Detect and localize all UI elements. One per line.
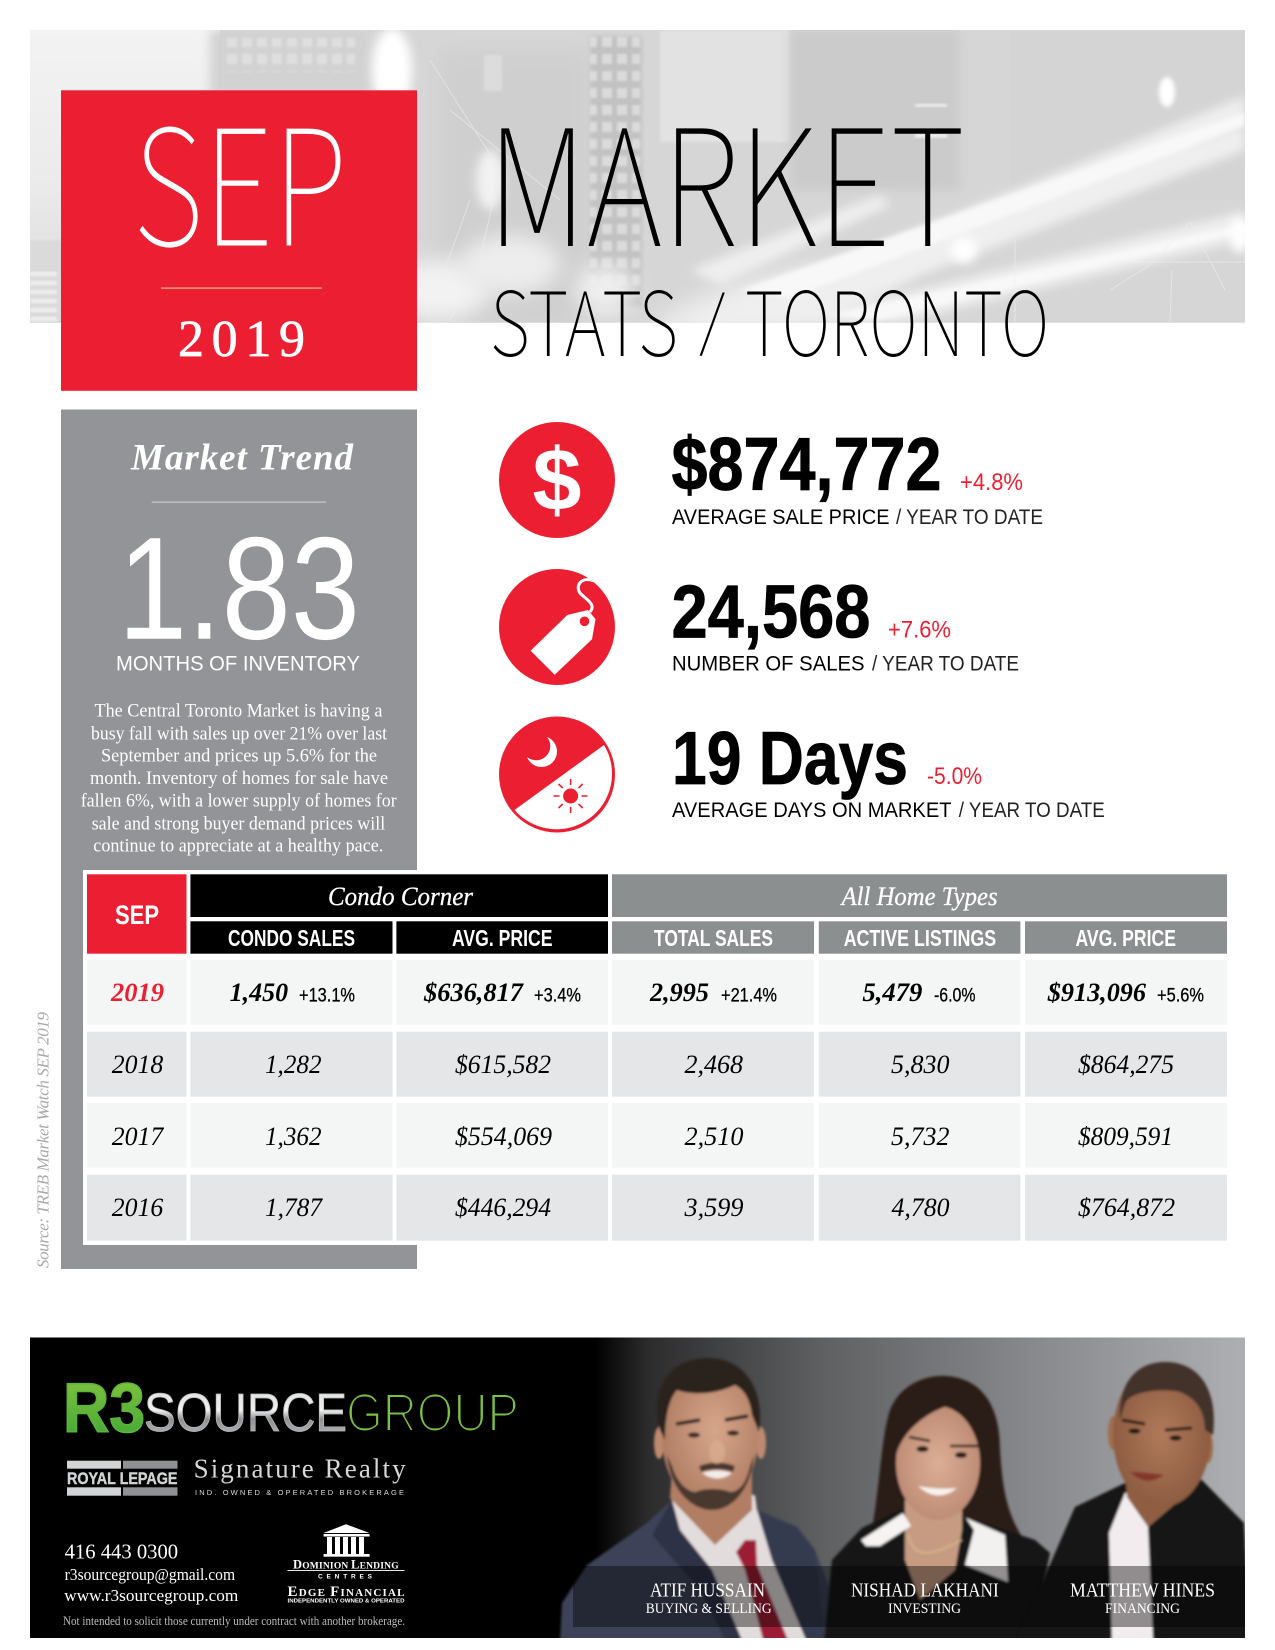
stat: number of sales: 24,568 (672, 569, 870, 653)
table row: 2016: 4,780 (892, 1193, 950, 1222)
table header: All Home Types: All Home Types (840, 882, 998, 911)
table row: 2017 (87, 1103, 1227, 1168)
big number 1.83: 1.83 (118, 507, 360, 670)
title: MARKET: MARKET (487, 58, 965, 293)
table row: 2017: 2017 (112, 1122, 164, 1151)
table row: 2017: 1,362 (265, 1122, 322, 1151)
table row: 2019 (87, 960, 1227, 1025)
contact details: 416 443 0300 (65, 1539, 178, 1563)
panel: red date block (61, 60, 417, 391)
caption: Nishad Lakhani: INVESTING (888, 1601, 961, 1617)
stat: average sale price: $874,772 (672, 422, 942, 506)
logo: Royal LePage (67, 1461, 178, 1496)
logo: Dominion Lending Centres: INDEPENDENTLY OWNED & OPERATED (288, 1599, 405, 1605)
caption: Matthew Hines: MATTHEW HINES (1070, 1580, 1215, 1602)
stat: days on market: / YEAR TO DATE (959, 799, 1105, 822)
subtitle: STATS / TORONTO: / (699, 268, 725, 364)
table row: 2016: 2016 (112, 1193, 163, 1222)
banner photo: city at night (30, 30, 1245, 323)
table row: 2019: +21.4% (721, 984, 777, 1006)
table header: active listings (819, 921, 1020, 954)
table header: All Home Types (612, 874, 1227, 917)
table: market statistics (83, 870, 1227, 1245)
table row: 2018: $615,582 (455, 1050, 551, 1079)
stat: average sale price: / YEAR TO DATE (896, 506, 1043, 529)
photo: Nishad Lakhani (824, 1376, 1050, 1640)
market trend paragraph: month. Inventory of homes for sale have (90, 768, 388, 789)
table row: 2019: +13.1% (299, 984, 355, 1006)
stat: average sale price (672, 422, 1043, 529)
table row: 2018: 5,830 (891, 1050, 950, 1079)
photo: Atif Hussain (560, 1358, 829, 1640)
table header: all avg price (1025, 921, 1227, 954)
stat: number of sales (672, 569, 1019, 676)
icon: day and night (499, 716, 615, 832)
market trend paragraph: The Central Toronto Market is having a (94, 701, 383, 722)
contact details (63, 1539, 405, 1628)
logo: Dominion Lending Centres: CENTRES (318, 1574, 373, 1581)
stat: days on market (672, 716, 1105, 822)
table header: total sales (612, 921, 814, 954)
table row: 2019: $636,817 (423, 978, 524, 1007)
caption band (573, 1566, 1245, 1627)
table row: 2018: 2,468 (684, 1050, 743, 1079)
table header: SEP (87, 874, 186, 954)
table row: 2019: -6.0% (934, 984, 976, 1006)
icon: dollar: $ (533, 430, 581, 529)
table header: condo sales (190, 921, 392, 954)
source note: Source: TREB Market Watch SEP 2019 (34, 1012, 52, 1268)
table row: 2019: $913,096 (1047, 978, 1146, 1007)
logo: Royal LePage: ROYAL LEPAGE (67, 1470, 178, 1488)
table row: 2017: 5,732 (891, 1122, 950, 1151)
table row: 2017: 2,510 (684, 1122, 744, 1151)
logo: Dominion Lending Centres (288, 1524, 405, 1605)
table row: 2017: $809,591 (1078, 1122, 1173, 1151)
table header: SEP: SEP (115, 900, 159, 930)
table row: 2016 (87, 1175, 1227, 1241)
contact details: www.r3sourcegroup.com (64, 1586, 238, 1605)
table row: 2019: +5.6% (1157, 984, 1204, 1006)
market trend paragraph: continue to appreciate at a healthy pace. (93, 836, 383, 857)
logo: R3 Source Group: SOURCE (144, 1383, 347, 1443)
caption: Nishad Lakhani: NISHAD LAKHANI (851, 1580, 999, 1602)
label: months of inventory: MONTHS OF INVENTORY (116, 652, 360, 676)
caption: Atif Hussain: BUYING & SELLING (646, 1601, 772, 1617)
market trend paragraph: sale and strong buyer demand prices will (92, 813, 385, 834)
table header: all avg price: AVG. PRICE (1076, 925, 1176, 951)
contact details: Not intended to solicit those currently under contract with another brokerage. (63, 1614, 405, 1628)
subtitle: STATS / TORONTO: STATS (490, 253, 678, 382)
footer panel (30, 1338, 1250, 1640)
table row: 2018 (87, 1032, 1227, 1097)
table row: 2016: $764,872 (1078, 1193, 1175, 1222)
caption: Atif Hussain (646, 1580, 772, 1617)
logo: R3 Source Group: GROUP (346, 1383, 519, 1443)
table header: condo avg price (396, 921, 608, 954)
heading: Market Trend: Market Trend (130, 437, 354, 478)
contact details: r3sourcegroup@gmail.com (65, 1565, 235, 1584)
heading: SEP: SEP (133, 60, 347, 292)
logo: Dominion Lending Centres: DOMINION LENDING (293, 1557, 399, 1571)
table row: 2018: 1,282 (265, 1050, 322, 1079)
icon: price tag (499, 569, 615, 685)
table row: 2019: 1,450 (230, 978, 288, 1007)
brokerage: Signature Realty: Signature Realty (194, 1453, 406, 1483)
stat: days on market: AVERAGE DAYS ON MARKET (672, 799, 952, 822)
brokerage: Signature Realty (194, 1453, 406, 1497)
logo: R3 Source Group (63, 1369, 519, 1447)
caption: Matthew Hines: FINANCING (1105, 1601, 1180, 1617)
subtitle: STATS / TORONTO (490, 253, 1049, 382)
table header: condo avg price: AVG. PRICE (452, 925, 552, 951)
table row: 2019: 5,479 (862, 978, 922, 1007)
table row: 2019: +3.4% (534, 984, 581, 1006)
panel: market trend (61, 410, 417, 1269)
stat: number of sales: NUMBER OF SALES (672, 653, 864, 676)
caption: Atif Hussain: ATIF HUSSAIN (650, 1580, 765, 1602)
table row: 2016: $446,294 (455, 1193, 551, 1222)
stat: average sale price: AVERAGE SALE PRICE (672, 506, 890, 529)
table row: 2018: $864,275 (1078, 1050, 1174, 1079)
stat: average sale price: +4.8% (960, 469, 1023, 496)
table header: active listings: ACTIVE LISTINGS (844, 925, 996, 951)
brokerage: Signature Realty: IND. OWNED & OPERATED BROKERAGE (195, 1488, 404, 1497)
table header: Condo Corner (190, 874, 608, 917)
table header: condo sales: CONDO SALES (228, 925, 355, 951)
market trend paragraph (81, 701, 397, 857)
icon: dollar (499, 422, 615, 538)
table row: 2018: 2018 (112, 1050, 163, 1079)
caption: Nishad Lakhani (851, 1580, 999, 1617)
market trend paragraph: fallen 6%, with a lower supply of homes for (81, 791, 397, 812)
stat: days on market: 19 Days (672, 716, 908, 800)
logo: R3 Source Group: R3 (63, 1369, 145, 1447)
stat: number of sales: +7.6% (888, 616, 951, 643)
photo: Matthew Hines (1016, 1362, 1250, 1640)
market trend paragraph: September and prices up 5.6% for the (101, 746, 377, 767)
table row: 2017: $554,069 (455, 1122, 552, 1151)
table header: Condo Corner: Condo Corner (328, 882, 474, 911)
year 2019: 2019 (178, 311, 305, 368)
market trend paragraph: busy fall with sales up over 21% over last (91, 723, 388, 744)
stat: number of sales: / YEAR TO DATE (872, 653, 1019, 676)
caption: Matthew Hines (1070, 1580, 1215, 1617)
logo: Dominion Lending Centres: EDGE FINANCIAL (288, 1584, 404, 1600)
subtitle: STATS / TORONTO: TORONTO (745, 253, 1049, 382)
table row: 2016: 3,599 (683, 1193, 744, 1222)
table row: 2019: 2,995 (649, 978, 709, 1007)
stat: days on market: -5.0% (927, 763, 982, 790)
table header: total sales: TOTAL SALES (654, 925, 773, 951)
table row: 2019: 2019 (110, 978, 164, 1007)
table row: 2016: 1,787 (265, 1193, 323, 1222)
